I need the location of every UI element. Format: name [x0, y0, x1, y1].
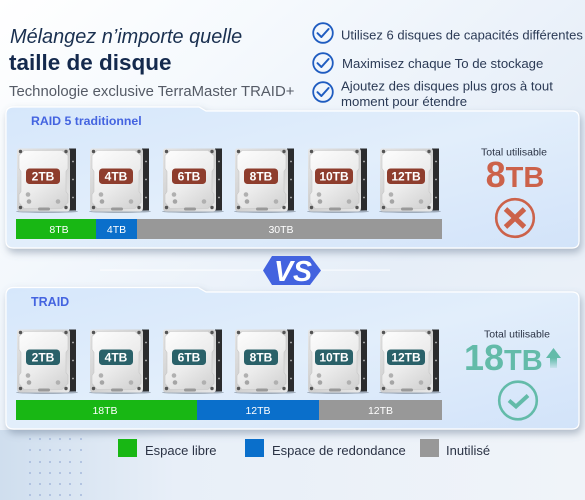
legend: espace libre	[118, 439, 217, 458]
legend: inutilise: Inutilisé	[446, 443, 490, 458]
total value: 8TB	[486, 154, 544, 195]
capacity bar: 8TB	[49, 224, 69, 236]
panel: RAID 5 traditionnel	[6, 107, 579, 248]
drive 8TB	[234, 330, 296, 394]
total label: Total utilisable	[484, 328, 550, 340]
drive 4TB: 4TB	[105, 170, 128, 184]
benefit list	[313, 23, 583, 109]
drive 8TB	[234, 148, 296, 213]
drive 10TB	[307, 148, 369, 213]
capacity bar	[16, 400, 442, 420]
drive 12TB: 12TB	[391, 350, 421, 364]
drive 6TB: 6TB	[178, 350, 201, 364]
drive 6TB	[162, 148, 224, 213]
panel heading: TRAID	[31, 295, 69, 309]
panel: TRAID	[6, 288, 579, 429]
drive 10TB	[307, 330, 369, 394]
icon: check 1	[313, 23, 333, 43]
drive 6TB	[162, 330, 224, 394]
capacity bar	[16, 219, 442, 239]
panel heading: RAID 5 traditionnel	[31, 114, 142, 128]
drive 6TB: 6TB	[178, 170, 201, 184]
decorative dots	[29, 438, 82, 496]
capacity bar: 12TB	[245, 405, 271, 417]
drive 4TB	[89, 330, 151, 394]
vs text: VS	[274, 256, 313, 288]
title: second line: taille de disque	[9, 50, 172, 75]
icon: cross	[496, 199, 534, 237]
drive 2TB	[16, 330, 78, 394]
legend: inutilise	[420, 439, 490, 458]
icon: check	[499, 382, 537, 419]
capacity bar: 12TB	[368, 405, 393, 417]
benefit 3: Ajoutez des disques plus gros à tout	[341, 78, 553, 94]
drive 10TB: 10TB	[319, 350, 349, 364]
panel background	[6, 288, 579, 429]
drives	[16, 330, 441, 394]
capacity bar: 18TB	[92, 405, 118, 417]
drive 4TB	[89, 148, 151, 213]
drive 2TB: 2TB	[32, 170, 55, 184]
drive 2TB	[16, 148, 78, 213]
legend: espace libre: Espace libre	[145, 443, 217, 458]
divider line	[100, 270, 390, 271]
drives	[16, 148, 441, 213]
icon: check 3	[313, 82, 333, 102]
legend: espace de redondance	[245, 439, 406, 458]
drive 12TB	[379, 148, 441, 213]
drive 8TB: 8TB	[250, 170, 273, 184]
panel background	[6, 107, 579, 248]
legend	[118, 439, 490, 458]
drive 12TB	[379, 330, 441, 394]
icon: check 2	[313, 53, 333, 73]
drive 12TB: 12TB	[391, 170, 421, 184]
total value: 18TB	[464, 337, 543, 378]
title: first line: Mélangez n’importe quelle	[10, 26, 242, 48]
capacity bar: 30TB	[268, 224, 294, 236]
benefit 2: Maximisez chaque To de stockage	[342, 56, 543, 71]
total label: Total utilisable	[481, 146, 547, 158]
vs badge	[263, 256, 321, 285]
drive 10TB: 10TB	[319, 170, 349, 184]
vs divider	[100, 256, 390, 288]
benefit 1: Utilisez 6 disques de capacités différentes	[341, 28, 583, 42]
benefit 3: moment pour étendre	[341, 94, 467, 109]
drive 4TB: 4TB	[105, 350, 128, 364]
capacity bar: 4TB	[107, 224, 126, 236]
icon: up arrow	[546, 348, 561, 368]
subtitle: Technologie exclusive TerraMaster TRAID+	[9, 84, 294, 100]
legend: espace de redondance: Espace de redondance	[272, 443, 406, 458]
drive 2TB: 2TB	[32, 350, 55, 364]
drive 8TB: 8TB	[250, 350, 273, 364]
